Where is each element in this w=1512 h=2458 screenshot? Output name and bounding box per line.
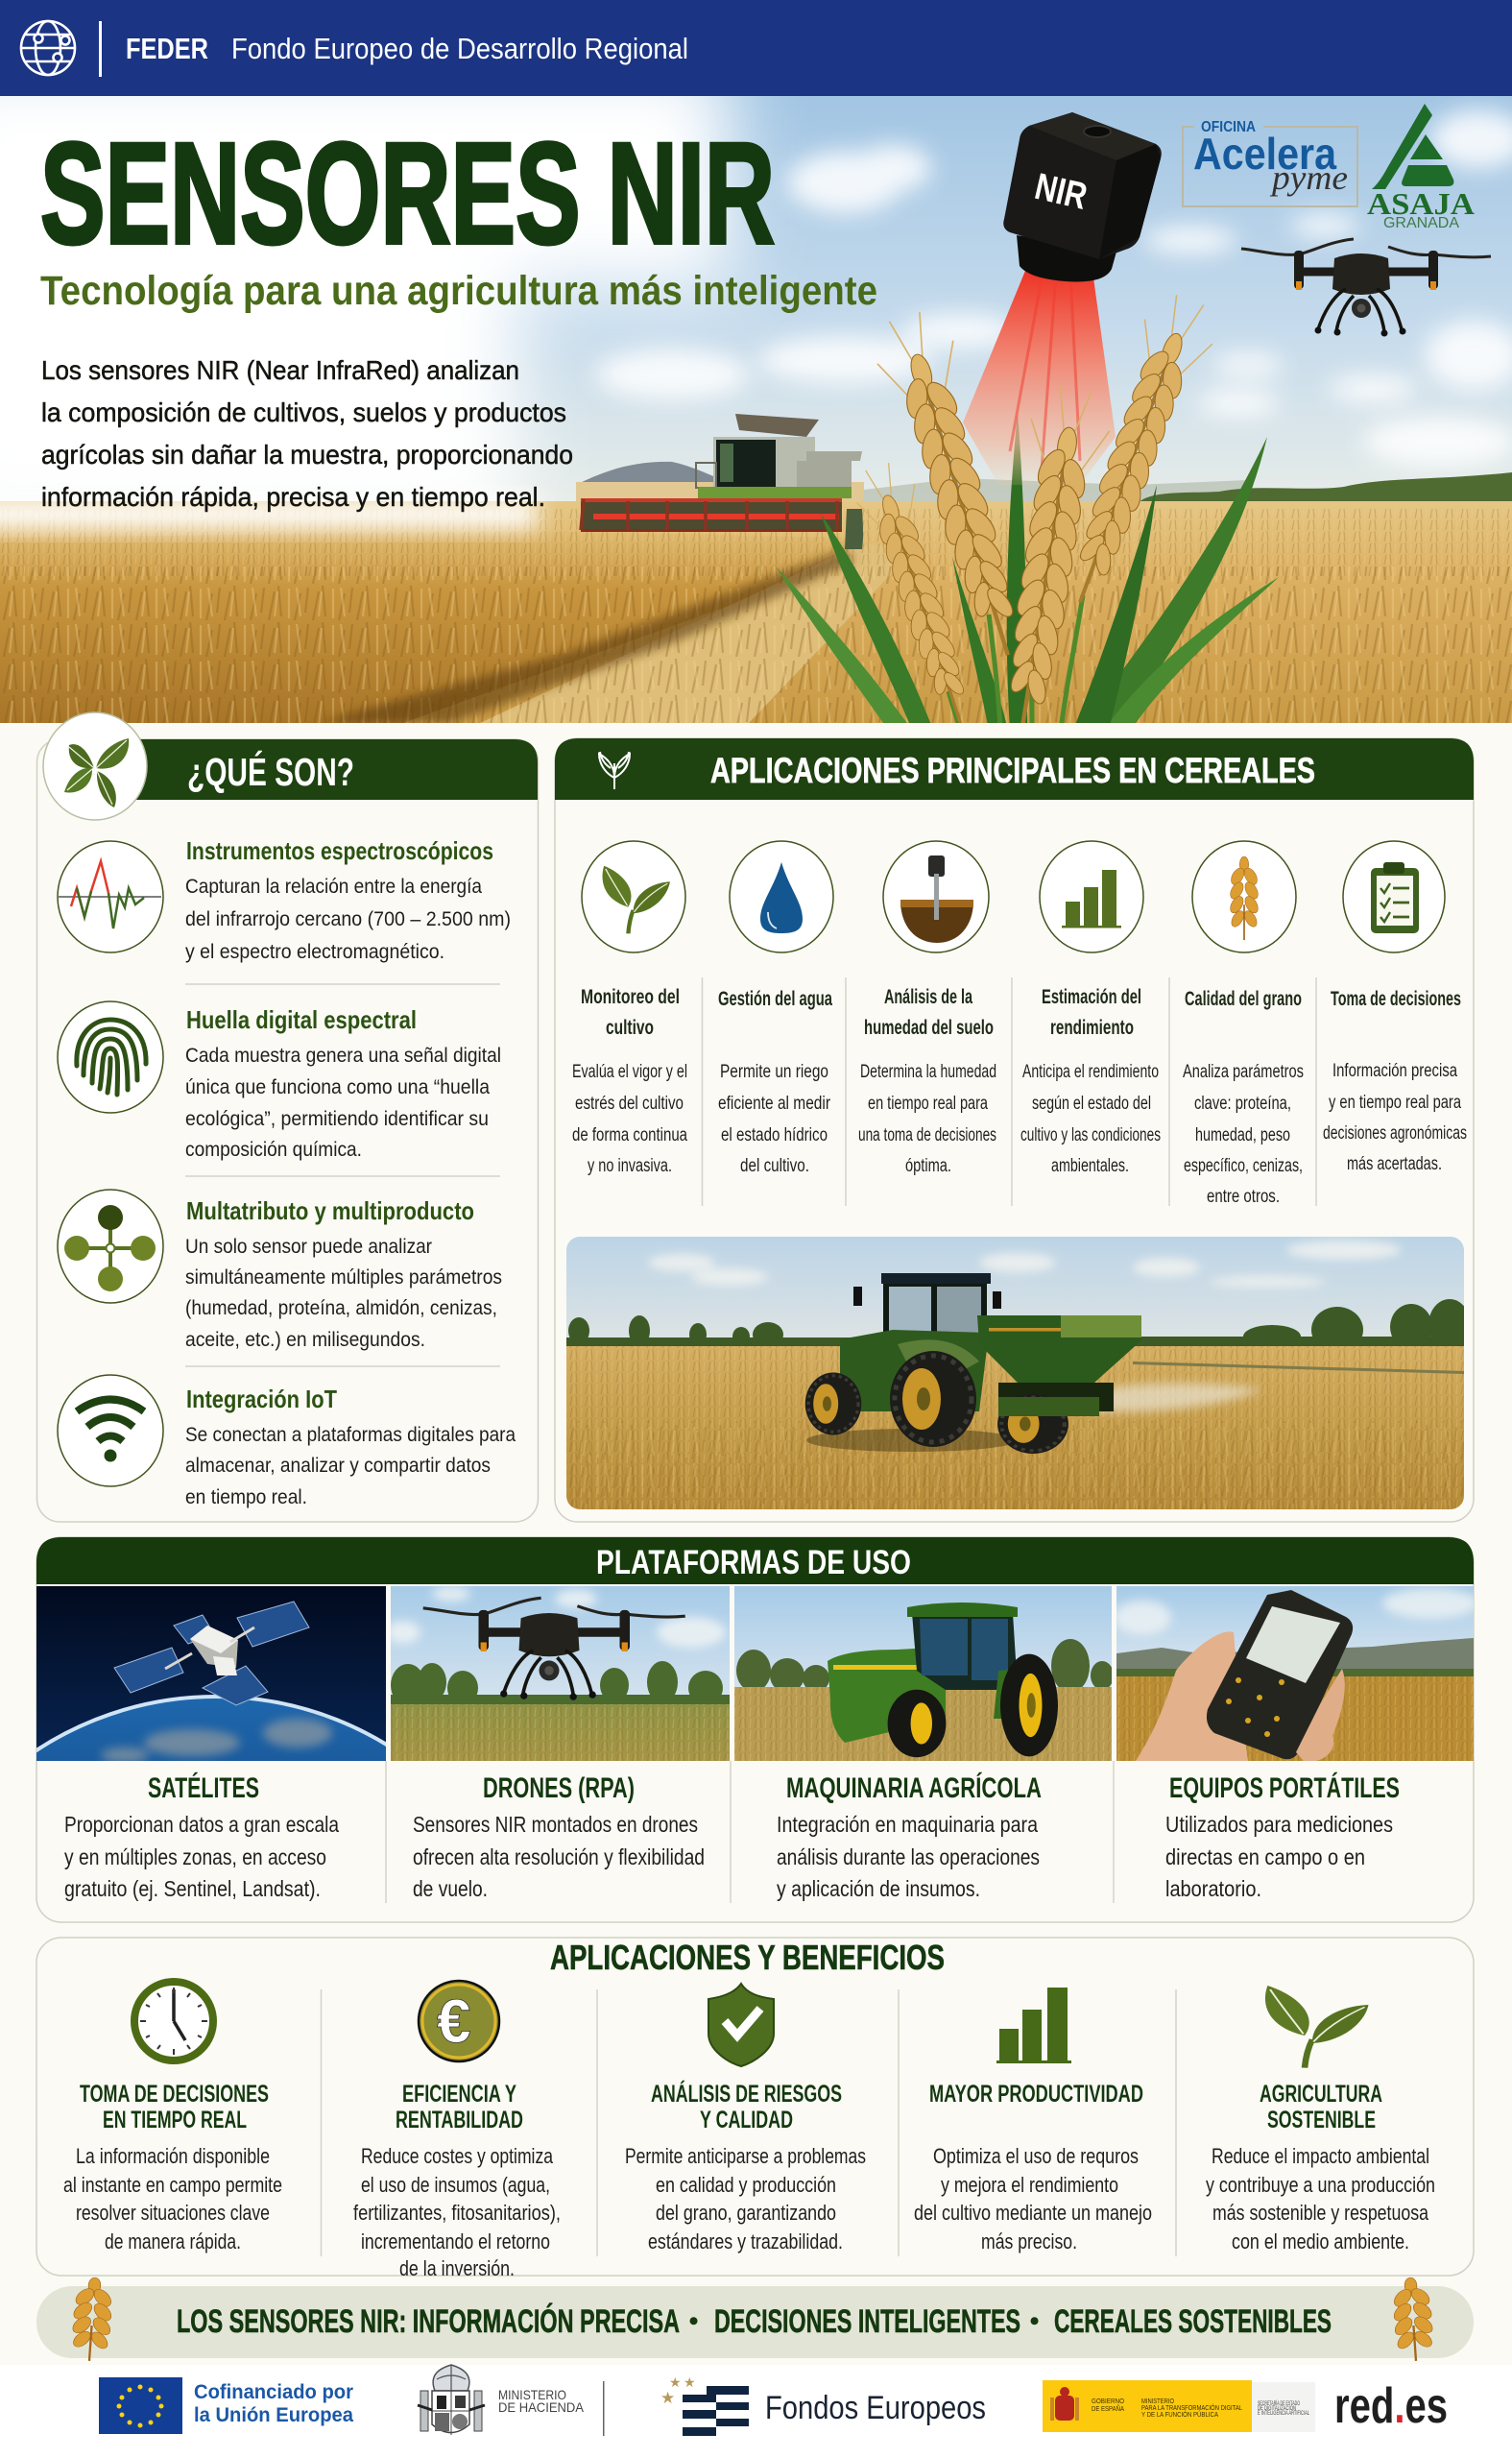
icon: spectrum [58,841,163,952]
column: monitoreo [572,986,687,1176]
column: grano: clave: proteína, [1194,1094,1291,1114]
card: maquinaria: análisis durante las operaciones [777,1844,1040,1869]
logo: Fondos Europeos: ★ [660,2389,675,2407]
intro text: Los sensores NIR (Near InfraRed) analizan [41,355,519,385]
column: grano: entre otros. [1207,1187,1280,1207]
heading: APLICACIONES PRINCIPALES EN CEREALES [710,751,1315,790]
text: ecológica”, permitiendo identificar su [185,1107,489,1130]
combine harvester [581,414,863,549]
icon: grain [1192,841,1296,952]
logo: Fondos Europeos: Fondos Europeos [765,2390,986,2426]
column: decisiones: más acertadas. [1347,1154,1442,1174]
text: Integración IoT [186,1385,337,1413]
title: SENSORES NIR [40,112,775,274]
column: grano: humedad, peso [1195,1125,1290,1145]
column: humedad: Análisis de la [884,986,972,1008]
NIR sensor: NIR [1031,166,1091,218]
column: agua: del cultivo. [740,1156,809,1176]
item: IoT [58,1375,516,1508]
column: rendimiento: según el estado del [1032,1094,1151,1114]
column: humedad: humedad del suelo [864,1017,994,1039]
benefit: tiempo real [63,1982,282,2253]
text: estándares y trazabilidad. [648,2229,843,2253]
column: monitoreo: y no invasiva. [588,1156,672,1176]
logo: red.es: red.es [1334,2378,1448,2434]
text [1206,2081,1435,2253]
text: y el espectro electromagnético. [185,940,444,963]
text: Se conectan a plataformas digitales para [185,1423,516,1446]
column: grano [1183,988,1304,1207]
column: grano: Calidad del grano [1185,988,1302,1010]
NIR beam [963,271,1116,485]
banner text [177,2303,1332,2340]
clouds [595,110,1512,467]
logo: Fondos Europeos: ★ [684,2374,696,2390]
column: rendimiento: Estimación del [1042,986,1141,1008]
column: monitoreo: Monitoreo del [581,986,680,1008]
logo: EU: Cofinanciado por [194,2381,353,2403]
icon: globe network [21,21,75,75]
text: Optimiza el uso de requros [933,2144,1139,2168]
text: el uso de insumos (agua, [361,2173,550,2197]
card: maquinaria: Integración en maquinaria para [777,1812,1038,1837]
text: Instrumentos espectroscópicos [186,836,493,865]
intro text: agrícolas sin dañar la muestra, proporcionando [41,440,573,470]
card: drones: Sensores NIR montados en drones [413,1812,698,1837]
text: y contribuye a una producción [1206,2173,1435,2197]
footer logos [0,2365,1512,2458]
icon: plant [1265,1986,1369,2068]
text: Reduce costes y optimiza [361,2144,554,2168]
heading: APLICACIONES Y BENEFICIOS [550,1938,945,1977]
card: equipos portátiles: directas en campo o en [1165,1844,1365,1869]
icon: coat of arms [418,2365,485,2435]
text: en tiempo real. [185,1485,307,1508]
logo: Ministerio de Hacienda: DE HACIENDA [498,2399,585,2415]
panel: qué son [36,712,538,1522]
column: rendimiento: cultivo y las condiciones [1020,1125,1161,1145]
column: agua: eficiente al medir [718,1094,831,1114]
text: ANÁLISIS DE RIESGOS [651,2080,842,2108]
header band [0,0,1512,96]
text: Multatributo y multiproducto [186,1196,474,1225]
text [625,2080,866,2253]
column: agua: Gestión del agua [718,988,832,1010]
banner text: • [689,2306,698,2335]
logo: Fondos Europeos: ★ [669,2374,682,2390]
text [63,2081,282,2253]
icon: clipboard [1343,841,1445,952]
logo: Oficina Acelera Pyme [1183,119,1357,206]
benefit: eficiencia [353,1981,561,2280]
card: maquinaria: MAQUINARIA AGRÍCOLA [786,1771,1042,1804]
icon: euro coin [419,1981,499,2061]
stems and leaves [776,413,1279,730]
photo: handheld [1114,1586,1478,1762]
card: drones: DRONES (RPA) [483,1772,635,1804]
column: rendimiento: Anticipa el rendimiento [1022,1062,1159,1082]
wheat ears [856,295,1213,723]
text: simultáneamente múltiples parámetros [185,1265,502,1289]
card: equipos portátiles: laboratorio. [1165,1876,1261,1901]
text: del grano, garantizando [656,2201,836,2225]
card: drones: de vuelo. [413,1876,488,1901]
icon: clock [134,1982,213,2060]
icon: fingerprint [58,1001,163,1113]
column: grano: Analiza parámetros [1183,1062,1304,1082]
column: monitoreo: cultivo [606,1017,654,1039]
column: decisiones: y en tiempo real para [1329,1093,1461,1113]
card: drones: ofrecen alta resolución y flexibilidad [413,1844,705,1869]
card: satélites: gratuito (ej. Sentinel, Landsat). [64,1876,321,1901]
column: rendimiento [1020,986,1161,1176]
text: y mejora el rendimiento [941,2173,1118,2197]
column: agua: el estado hídrico [721,1125,828,1145]
text: Huella digital espectral [186,1005,417,1034]
logo: Ministerio de Hacienda [418,2365,605,2436]
icon: white sprig [599,752,630,789]
text: TOMA DE DECISIONES [80,2081,269,2108]
card: satélites: SATÉLITES [148,1771,259,1804]
white glow behind title [0,58,730,533]
column: decisiones: Información precisa [1332,1061,1457,1081]
icon: leaf [582,841,685,952]
logo: Gobierno de España: DE DIGITALIZACIÓN [1258,2405,1296,2412]
heading: PLATAFORMAS DE USO [596,1544,911,1581]
column: humedad: en tiempo real para [868,1094,988,1114]
text: con el medio ambiente. [1232,2229,1409,2253]
logo: EU: la Unión Europea [194,2404,353,2426]
logo: Gobierno de España: E INTELIGENCIA ARTIFICIAL [1258,2411,1309,2417]
item: multiatributo [58,1190,502,1351]
column: agua: Permite un riego [720,1062,828,1082]
banner text: CEREALES SOSTENIBLES [1054,2303,1332,2340]
card: drones [413,1772,705,1901]
text: Reduce el impacto ambiental [1212,2144,1429,2168]
text: más preciso. [981,2229,1077,2253]
logo: EU [99,2377,353,2434]
icon: euro coin: € [437,1987,471,2056]
icon row [582,841,1445,952]
intro text [41,355,573,512]
text: fertilizantes, fitosanitarios), [353,2201,561,2225]
text: incrementando el retorno [361,2229,550,2253]
column: agua [718,988,832,1176]
icon: bars [1040,841,1143,952]
photo: tractor spreading [566,1237,1471,1509]
logo: Gobierno de España: MINISTERIO [1141,2397,1174,2405]
icon: bars [996,1988,1071,2063]
text: del infrarrojo cercano (700 – 2.500 nm) [185,907,511,930]
text: Permite anticiparse a problemas [625,2144,866,2168]
icon: soil probe [883,841,989,952]
text [185,1196,502,1351]
panel: aplicaciones y beneficios [36,1938,1474,2280]
text [185,836,511,963]
card: equipos portátiles: EQUIPOS PORTÁTILES [1169,1771,1400,1804]
NIR sensor [1003,112,1162,281]
logo: Gobierno de España [1043,2380,1315,2432]
column: decisiones [1323,988,1467,1174]
text: Cada muestra genera una señal digital [185,1044,501,1067]
text: única que funciona como una “huella [185,1075,490,1098]
card: satélites [64,1771,339,1901]
photo: satellite [36,1586,386,1761]
column: humedad [858,986,996,1176]
header text: FEDER [126,32,208,65]
text [914,2081,1152,2253]
banner text: • [1030,2306,1039,2335]
card: satélites: y en múltiples zonas, en acceso [64,1844,326,1869]
drone [1241,239,1491,336]
wheat fields [0,501,1512,723]
text: AGRICULTURA [1260,2081,1382,2108]
intro text: la composición de cultivos, suelos y productos [41,398,566,427]
text: Un solo sensor puede analizar [185,1235,432,1258]
text: más sostenible y respetuosa [1212,2201,1429,2225]
column: humedad: una toma de decisiones [858,1125,996,1145]
icon: shield [708,1984,774,2066]
icon: nodes [58,1190,163,1303]
subtitle: Tecnología para una agricultura más inteligente [40,268,877,314]
card: maquinaria [777,1771,1042,1901]
text: del cultivo mediante un manejo [914,2201,1152,2225]
logo: ASAJA Granada [1367,104,1475,231]
logo: ASAJA Granada: ASAJA [1367,186,1475,221]
column: monitoreo: estrés del cultivo [575,1094,684,1114]
icon: wifi [58,1375,163,1486]
photo: machinery [734,1586,1114,1761]
text: aceite, etc.) en milisegundos. [185,1328,425,1351]
text: RENTABILIDAD [396,2107,523,2133]
item: instrumentos [58,836,511,963]
icon: leaves badge [43,712,147,820]
text: composición química. [185,1138,362,1161]
photo: drone [386,1586,730,1761]
logo: Oficina Acelera Pyme: pyme [1269,158,1348,197]
text: al instante en campo permite [63,2173,282,2197]
logo: Ministerio de Hacienda: MINISTERIO [498,2387,566,2402]
item: huella [58,1001,501,1161]
banner text: DECISIONES INTELIGENTES [714,2303,1020,2340]
icon: right wheat [1388,2277,1438,2363]
text: en calidad y producción [656,2173,836,2197]
closing banner [36,2277,1474,2363]
text [353,2081,561,2280]
card: satélites: Proporcionan datos a gran escala [64,1812,339,1837]
header text: Fondo Europeo de Desarrollo Regional [231,32,688,65]
hero image [0,58,1512,744]
text [185,1005,501,1161]
column: humedad: Determina la humedad [860,1062,996,1082]
intro text: información rápida, precisa y en tiempo real. [41,482,545,512]
card: equipos portátiles [1165,1771,1400,1901]
text: (humedad, proteína, almidón, cenizas, [185,1296,497,1319]
benefit: riesgos [625,1984,866,2253]
column: rendimiento: ambientales. [1051,1156,1129,1176]
text: de manera rápida. [105,2229,241,2253]
logo: Oficina Acelera Pyme: Acelera [1193,129,1336,179]
card: equipos portátiles: Utilizados para mediciones [1165,1812,1393,1837]
logo: Gobierno de España: SECRETARÍA DE ESTADO [1258,2400,1300,2407]
panel: plataformas de uso [36,1536,1475,1923]
heading: ¿QUÉ SON? [187,750,354,794]
column: monitoreo: de forma continua [572,1125,687,1145]
logo: ASAJA Granada: GRANADA [1383,215,1459,231]
panel: aplicaciones principales [555,738,1474,1522]
logo: Gobierno de España: DE ESPAÑA [1092,2404,1124,2413]
icon: left wheat [67,2277,117,2363]
text: Y CALIDAD [700,2107,793,2133]
text: Capturan la relación entre la energía [185,875,482,898]
banner text: LOS SENSORES NIR: INFORMACIÓN PRECISA [177,2303,680,2340]
text [185,1385,516,1508]
text: MAYOR PRODUCTIVIDAD [929,2081,1143,2108]
logo: Gobierno de España: PARA LA TRANSFORMACIÓN DIGITAL [1141,2403,1242,2412]
logo: Fondos Europeos [660,2374,986,2436]
column: grano: específico, cenizas, [1184,1156,1303,1176]
logo: Gobierno de España: Y DE LA FUNCIÓN PÚBLICA [1141,2410,1218,2419]
icon: water drop [730,841,833,952]
text: La información disponible [76,2144,270,2168]
benefit: productividad [914,1988,1152,2253]
logo: Gobierno de España: GOBIERNO [1092,2397,1124,2405]
tractor [805,1273,1262,1454]
text: almacenar, analizar y compartir datos [185,1454,491,1477]
text: EN TIEMPO REAL [103,2107,247,2133]
benefit: agricultura sostenible [1206,1986,1435,2253]
distant horizon [582,461,713,482]
logo: Oficina Acelera Pyme: OFICINA [1201,119,1256,135]
column: monitoreo: Evalúa el vigor y el [572,1062,687,1082]
card: maquinaria: y aplicación de insumos. [777,1876,980,1901]
text: EFICIENCIA Y [402,2081,516,2108]
text: SOSTENIBLE [1267,2107,1376,2133]
column: humedad: óptima. [905,1156,951,1176]
column: rendimiento: rendimiento [1050,1017,1134,1039]
text: de la inversión. [399,2256,515,2280]
text: resolver situaciones clave [76,2201,270,2225]
